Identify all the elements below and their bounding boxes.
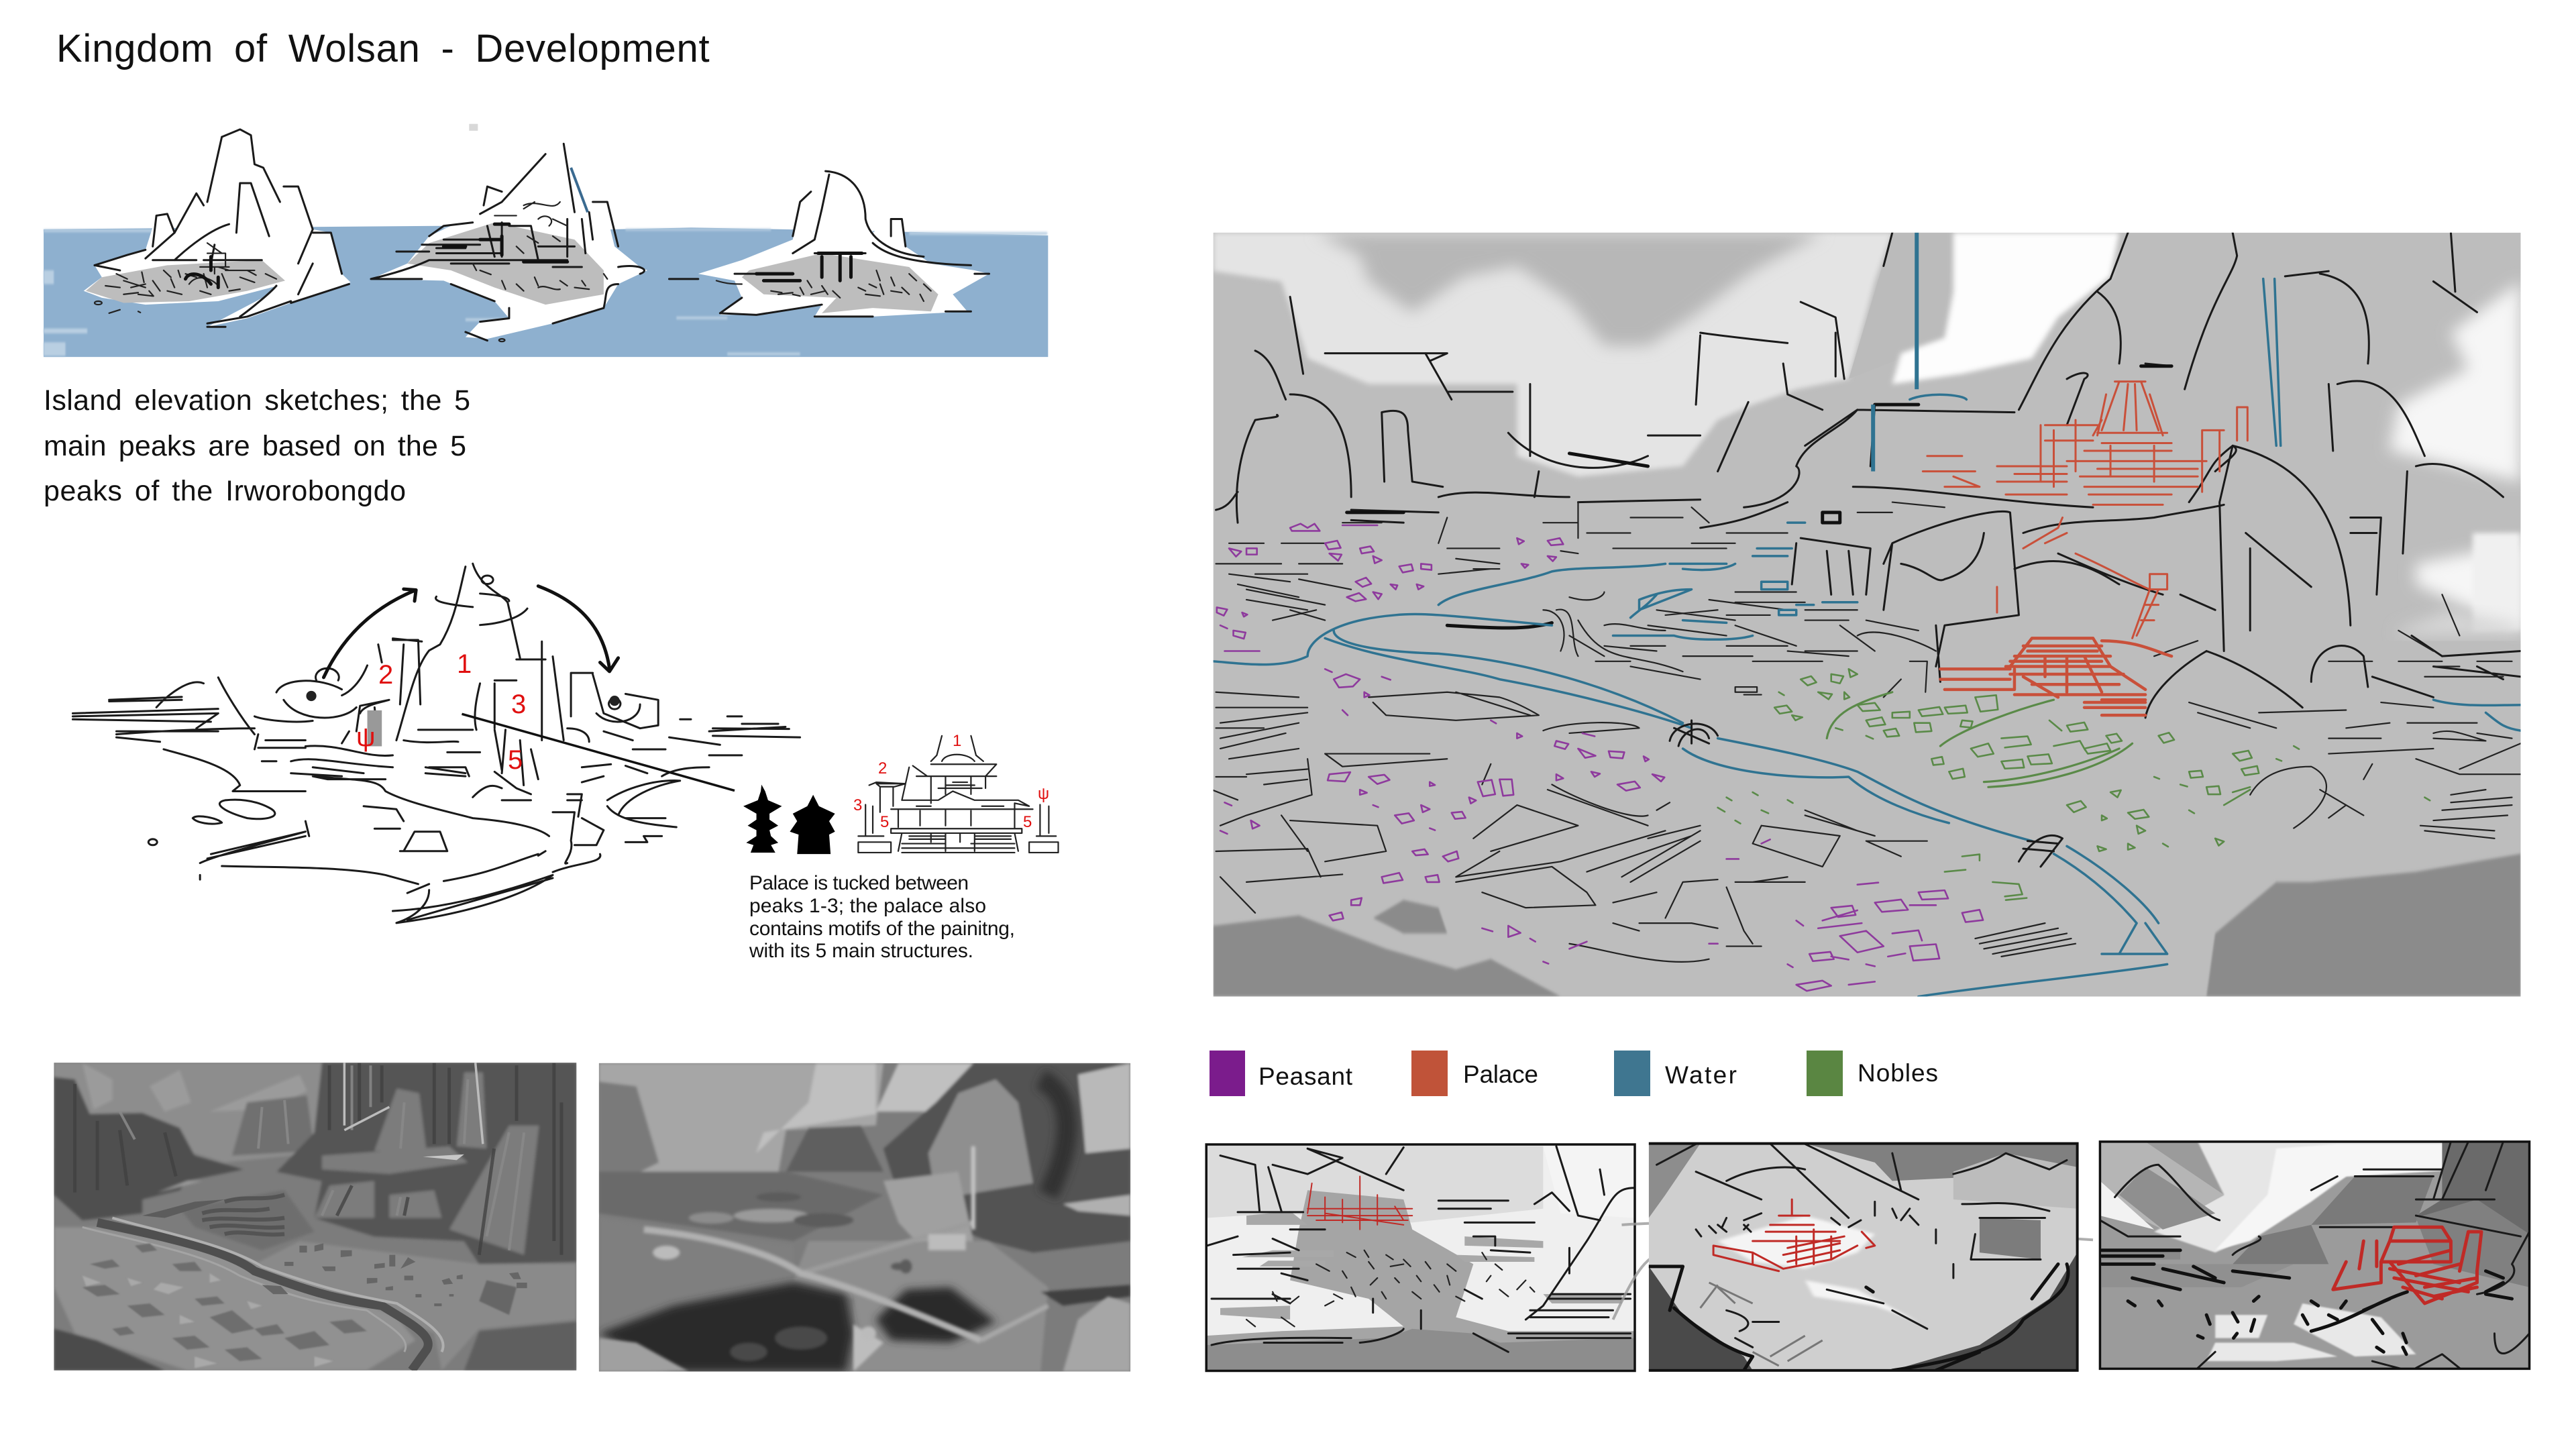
sky column [1849, 233, 1953, 379]
panel: value painting 2 [599, 1063, 1130, 1372]
peak numbers: 5 [508, 745, 523, 775]
legend: peasant: Peasant [1258, 1063, 1353, 1090]
panel: thumbnail sketches [1206, 1139, 2530, 1371]
sea highlights [44, 227, 1047, 356]
sky cloud mass [1316, 233, 1823, 345]
legend: palace: Palace [1463, 1061, 1538, 1088]
peak numbers: ψ [356, 722, 376, 752]
sky light patches [1214, 233, 1892, 476]
text: island caption [44, 384, 470, 507]
linework: fields [1212, 502, 2521, 962]
thumbnail 2 [1649, 1139, 2078, 1371]
sea [44, 226, 1048, 357]
stray ghost lines across thumbnail 2 [1613, 1222, 2093, 1320]
icon: pagoda silhouette [743, 785, 782, 853]
thumbnail 3 [2100, 1142, 2530, 1371]
peak numbers: 2 [378, 660, 393, 690]
water [1214, 279, 2521, 997]
legend: nobles [1807, 1051, 1938, 1096]
arrow: left arc [323, 589, 416, 678]
text: palace caption: with its 5 main structures. [749, 940, 973, 962]
pointer line [462, 714, 735, 791]
legend [1210, 1051, 1938, 1096]
foreground rock right [2206, 854, 2521, 997]
white clouds centre [1892, 233, 2119, 384]
palace numbers: 5 [1023, 813, 1032, 831]
foreground rock left [1214, 900, 1560, 997]
text: island caption: main peaks are based on the 5 [44, 430, 466, 462]
terraces [202, 1195, 284, 1234]
palace numbers: ψ [1038, 785, 1049, 803]
peak numbers [356, 649, 526, 775]
landscape linework [72, 564, 800, 923]
panel: peak layout sketch [72, 564, 1059, 923]
palace numbers: 5 [880, 813, 889, 831]
palace numbers: 2 [878, 759, 887, 777]
bridges [1670, 720, 2062, 867]
arrow: right arc [538, 586, 619, 672]
noble settlements [1718, 669, 2430, 900]
linework: dark accents [1347, 366, 2171, 628]
legend: palace [1411, 1051, 1538, 1096]
text: palace caption: peaks 1-3; the palace also [749, 895, 986, 917]
panel: island elevation sketches [44, 124, 1048, 357]
island 1 [84, 129, 351, 327]
light streak [2473, 533, 2521, 631]
legend: water [1614, 1051, 1737, 1096]
panel: main land-use sketch [1212, 233, 2521, 997]
peak numbers: 1 [457, 649, 472, 679]
legend: nobles: Nobles [1858, 1059, 1938, 1087]
base tone [1214, 233, 2521, 997]
peak numbers: 3 [511, 690, 526, 719]
text: island caption: Island elevation sketches; the 5 [44, 384, 470, 417]
hatch: peak shading [368, 710, 382, 746]
palace numbers [853, 732, 1049, 831]
title: Kingdom of Wolsan - Development [56, 27, 710, 70]
legend: water: Water [1665, 1061, 1737, 1089]
icon: tower silhouette [790, 795, 835, 854]
palace structures [1923, 382, 2247, 638]
panel: value painting 1 [54, 1063, 576, 1371]
thumbnail 1 [1206, 1144, 1635, 1371]
text: island caption: peaks of the Irworobongdo [44, 475, 406, 507]
text: palace caption: contains motifs of the painitng, [749, 918, 1015, 940]
peasant settlements [1217, 524, 1983, 991]
linework: terrain and cliffs [1216, 233, 2521, 718]
stray mark [469, 124, 478, 131]
peak eyes [306, 691, 620, 706]
palace numbers: 1 [953, 732, 961, 750]
lower right haze [2398, 610, 2521, 636]
text: palace caption [749, 872, 1015, 962]
palace numbers: 3 [853, 796, 862, 814]
text: palace caption: Palace is tucked between [749, 872, 969, 894]
cliff striations [75, 1063, 561, 1255]
legend: peasant [1210, 1051, 1353, 1096]
white clouds right [2390, 281, 2521, 631]
island 2 [371, 144, 647, 341]
island 3 [669, 171, 989, 317]
icon: palace line drawing [858, 736, 1059, 853]
